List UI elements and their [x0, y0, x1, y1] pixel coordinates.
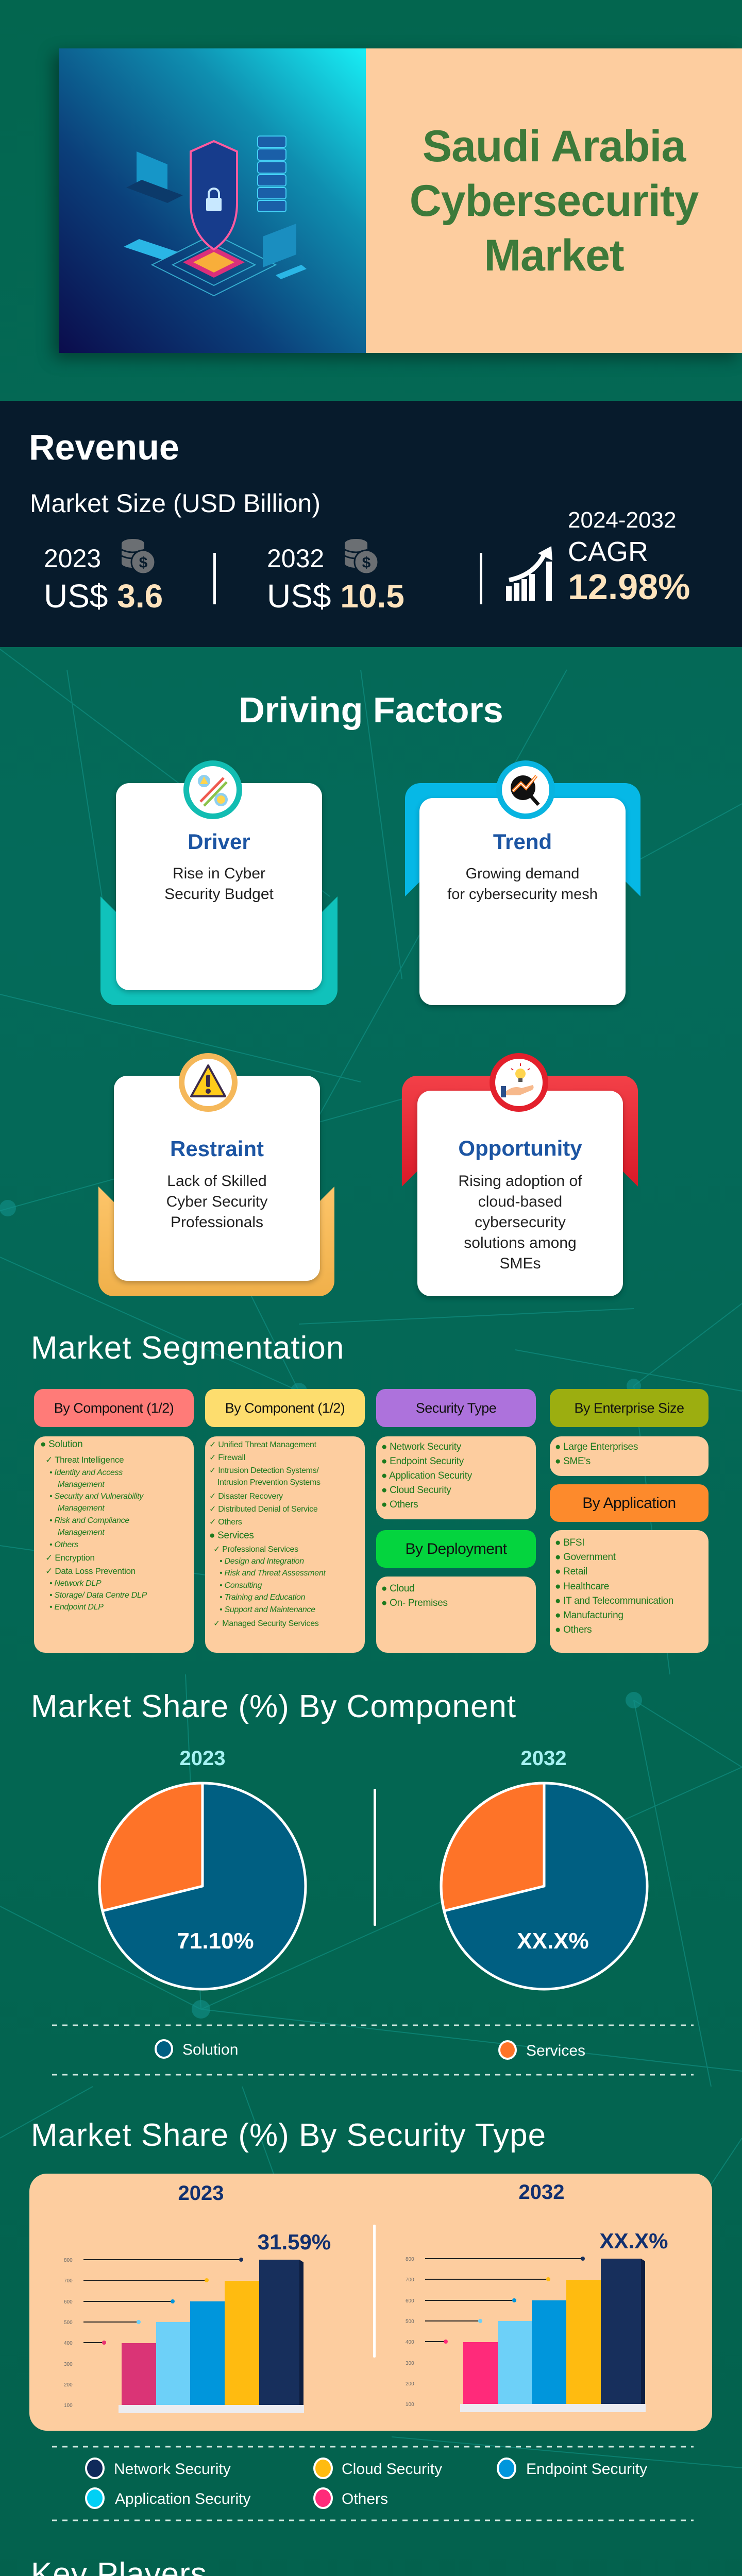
- chart 2032: 200: [406, 2381, 414, 2387]
- revenue heading: Revenue: [29, 427, 179, 467]
- CAGR: 2024-2032: [568, 507, 676, 533]
- card: restraint: Professionals: [171, 1214, 263, 1231]
- chart 2023: 800: [64, 2258, 73, 2263]
- 2032 value: 2032: [267, 544, 324, 573]
- segmentation column: by component 2: ✓ Unified Threat Management: [209, 1440, 316, 1449]
- segmentation column: by component 2: Intrusion Prevention Systems: [217, 1478, 321, 1487]
- segmentation column: enterprise size and application: ● Large Enterprises: [555, 1442, 638, 1452]
- segmentation column: by component 2: [205, 1389, 365, 1653]
- segmentation column: enterprise size and application: [550, 1389, 709, 1653]
- segmentation column: by component 2: By Component (1/2): [225, 1400, 345, 1416]
- 2032 value: US$ 10.5: [267, 578, 404, 615]
- CAGR: 12.98%: [568, 567, 690, 607]
- legend: security type: Others: [342, 2490, 388, 2507]
- legend: security type: Network Security: [114, 2461, 231, 2478]
- segmentation column: by component 2: ✓ Disaster Recovery: [209, 1492, 283, 1501]
- segmentation column: security type and deployment: [376, 1389, 536, 1653]
- segmentation column: enterprise size and application: ● Healthcare: [555, 1581, 609, 1592]
- segmentation column: enterprise size and application: By Application: [582, 1494, 676, 1512]
- chart 2032: 800: [406, 2257, 414, 2262]
- card: restraint: Cyber Security: [166, 1193, 267, 1210]
- pie 2032: XX.X%: [517, 1928, 589, 1954]
- icon: warning: [179, 1053, 238, 1112]
- segmentation column: by component 1: Management: [58, 1528, 104, 1537]
- 2023 value: US$ 3.6: [44, 578, 163, 615]
- chart 2023: 2023: [178, 2182, 224, 2205]
- chart 2032: 300: [406, 2361, 414, 2366]
- chart 2023: 600: [64, 2299, 73, 2305]
- segmentation column: security type and deployment: ● Endpoint Security: [381, 1456, 464, 1467]
- segmentation column: by component 2: • Training and Education: [220, 1593, 305, 1602]
- icon: trend: [497, 760, 554, 819]
- heading: market share by component: Market Share (%) By Component: [31, 1689, 516, 1724]
- chart 2032: 100: [406, 2402, 414, 2408]
- segmentation column: security type and deployment: Security Type: [416, 1400, 496, 1416]
- heading: market share by security type: Market Share (%) By Security Type: [31, 2117, 546, 2153]
- segmentation column: security type and deployment: ● Network Security: [381, 1442, 461, 1452]
- card: opportunity: Opportunity: [458, 1136, 582, 1160]
- card: driver: Rise in Cyber: [173, 865, 265, 882]
- chart 2032: 400: [406, 2340, 414, 2345]
- card: driver: Security Budget: [164, 886, 274, 903]
- legend: component: Services: [526, 2042, 585, 2059]
- segmentation column: by component 1: • Storage/ Data Centre DLP: [49, 1591, 147, 1600]
- heading: driving factors: Driving Factors: [239, 690, 503, 730]
- chart 2023: 100: [64, 2403, 73, 2409]
- card: trend: for cybersecurity mesh: [447, 886, 598, 903]
- segmentation column: by component 1: • Others: [49, 1540, 78, 1549]
- icon: opportunity: [490, 1053, 548, 1112]
- CAGR: CAGR: [568, 536, 648, 567]
- icon: driver: [183, 760, 242, 819]
- segmentation column: by component 2: ✓ Others: [209, 1518, 242, 1527]
- segmentation column: by component 1: • Identity and Access: [49, 1468, 123, 1477]
- chart 2032: 2032: [519, 2181, 564, 2204]
- segmentation column: security type and deployment: ● Application Security: [381, 1470, 472, 1481]
- segmentation column: by component 1: • Endpoint DLP: [49, 1603, 104, 1612]
- chart 2032: XX.X%: [599, 2229, 668, 2253]
- segmentation column: security type and deployment: ● Cloud: [381, 1583, 414, 1594]
- legend: component: Solution: [182, 2041, 238, 2058]
- card: opportunity: Rising adoption of: [458, 1173, 582, 1190]
- segmentation column: by component 2: ● Services: [209, 1530, 254, 1541]
- 2032 value: [267, 539, 404, 615]
- segmentation column: enterprise size and application: ● Others: [555, 1624, 592, 1635]
- segmentation column: enterprise size and application: ● Retail: [555, 1566, 587, 1577]
- segmentation column: by component 2: ✓ Professional Services: [213, 1545, 298, 1554]
- pie 2023: 2023: [180, 1747, 225, 1770]
- card: trend: [405, 760, 640, 1009]
- chart 2023: 31.59%: [258, 2230, 331, 2254]
- title: Saudi Arabia: [423, 122, 685, 171]
- title: [366, 48, 742, 353]
- legend: security type: Endpoint Security: [526, 2461, 647, 2478]
- chart 2032: 700: [406, 2277, 414, 2283]
- bar chart panel: security type: [29, 2174, 712, 2431]
- segmentation column: by component 2: • Consulting: [220, 1581, 262, 1590]
- segmentation column: security type and deployment: ● Others: [381, 1499, 418, 1510]
- pie chart: component 2023 and 2032: [52, 1747, 694, 2075]
- legend: component: [156, 2040, 585, 2059]
- CAGR: [568, 507, 690, 607]
- segmentation column: by component 2: • Risk and Threat Assessment: [220, 1569, 326, 1578]
- legend: security type: [52, 2446, 694, 2521]
- card: opportunity: SMEs: [499, 1255, 541, 1272]
- card: driver: Driver: [188, 829, 250, 854]
- icon: coins: [122, 539, 155, 573]
- legend: security type: Cloud Security: [342, 2461, 442, 2478]
- card: restraint: Restraint: [170, 1137, 264, 1161]
- card: restraint: [98, 1053, 334, 1296]
- chart 2023: 400: [64, 2341, 73, 2346]
- segmentation column: by component 1: By Component (1/2): [54, 1400, 174, 1416]
- segmentation column: by component 2: • Support and Maintenance: [220, 1605, 315, 1614]
- heading: market segmentation: Market Segmentation: [31, 1330, 344, 1366]
- card: opportunity: [402, 1053, 638, 1299]
- card: trend: Growing demand: [466, 866, 579, 882]
- segmentation column: security type and deployment: ● Cloud Security: [381, 1485, 451, 1496]
- segmentation column: by component 2: ✓ Firewall: [209, 1453, 245, 1462]
- segmentation column: security type and deployment: By Deployment: [406, 1540, 507, 1557]
- segmentation column: by component 1: ✓ Threat Intelligence: [45, 1455, 124, 1465]
- card: restraint: Lack of Skilled: [167, 1173, 267, 1190]
- segmentation column: enterprise size and application: ● SME's: [555, 1456, 591, 1467]
- segmentation column: by component 2: ✓ Managed Security Services: [213, 1619, 319, 1628]
- card: opportunity: solutions among: [464, 1234, 577, 1251]
- segmentation column: by component 1: Management: [58, 1504, 104, 1513]
- card: driver: [100, 760, 338, 1005]
- segmentation column: by component 1: ● Solution: [40, 1439, 82, 1450]
- segmentation column: by component 2: ✓ Intrusion Detection Systems/: [209, 1466, 318, 1475]
- pie 2023: [99, 1747, 306, 1989]
- 2023 value: [44, 539, 163, 615]
- segmentation column: by component 1: Management: [58, 1480, 104, 1489]
- segmentation column: by component 1: • Security and Vulnerability: [49, 1492, 143, 1501]
- segmentation column: enterprise size and application: ● Government: [555, 1552, 616, 1563]
- chart 2023: 300: [64, 2362, 73, 2367]
- header panel: [59, 48, 742, 353]
- segmentation column: by component 2: • Design and Integration: [220, 1557, 304, 1566]
- revenue band: [0, 401, 742, 647]
- icon: coins: $: [362, 554, 371, 571]
- segmentation column: enterprise size and application: ● Manufacturing: [555, 1610, 623, 1621]
- card: trend: Trend: [493, 829, 552, 854]
- segmentation column: by component 1: • Network DLP: [49, 1579, 101, 1588]
- icon: coins: [345, 539, 377, 573]
- 2023 value: 2023: [44, 544, 101, 573]
- icon: growth chart arrow: [506, 546, 552, 601]
- segmentation column: enterprise size and application: By Enterprise Size: [574, 1400, 684, 1416]
- card: opportunity: cybersecurity: [475, 1214, 566, 1231]
- chart 2023: [64, 2182, 331, 2413]
- segmentation column: by component 1: • Risk and Compliance: [49, 1516, 129, 1525]
- segmentation column: by component 2: ✓ Distributed Denial of Service: [209, 1505, 317, 1514]
- chart 2032: 600: [406, 2298, 414, 2304]
- pie 2032: [441, 1747, 647, 1989]
- chart 2023: 700: [64, 2278, 73, 2284]
- chart 2032: [406, 2181, 668, 2412]
- segmentation column: security type and deployment: ● On- Premises: [381, 1598, 448, 1608]
- chart 2023: 500: [64, 2320, 73, 2326]
- card: opportunity: cloud-based: [478, 1193, 562, 1210]
- segmentation column: by component 1: ✓ Data Loss Prevention: [45, 1566, 136, 1576]
- segmentation column: by component 1: [34, 1389, 194, 1653]
- icon: coins: $: [139, 554, 148, 571]
- legend: security type: Application Security: [115, 2490, 250, 2507]
- title: Cybersecurity: [410, 176, 698, 226]
- segmentation column: enterprise size and application: ● BFSI: [555, 1537, 584, 1548]
- chart 2032: 500: [406, 2319, 414, 2325]
- pie 2032: 2032: [521, 1747, 566, 1770]
- market size label: Market Size (USD Billion): [30, 489, 321, 518]
- segmentation column: by component 1: ✓ Encryption: [45, 1553, 95, 1563]
- pie 2023: 71.10%: [177, 1928, 254, 1954]
- segmentation column: enterprise size and application: ● IT and Telecommunication: [555, 1596, 673, 1606]
- title: Market: [484, 231, 624, 280]
- header image: cybersecurity illustration: [59, 48, 366, 353]
- chart 2023: 200: [64, 2382, 73, 2388]
